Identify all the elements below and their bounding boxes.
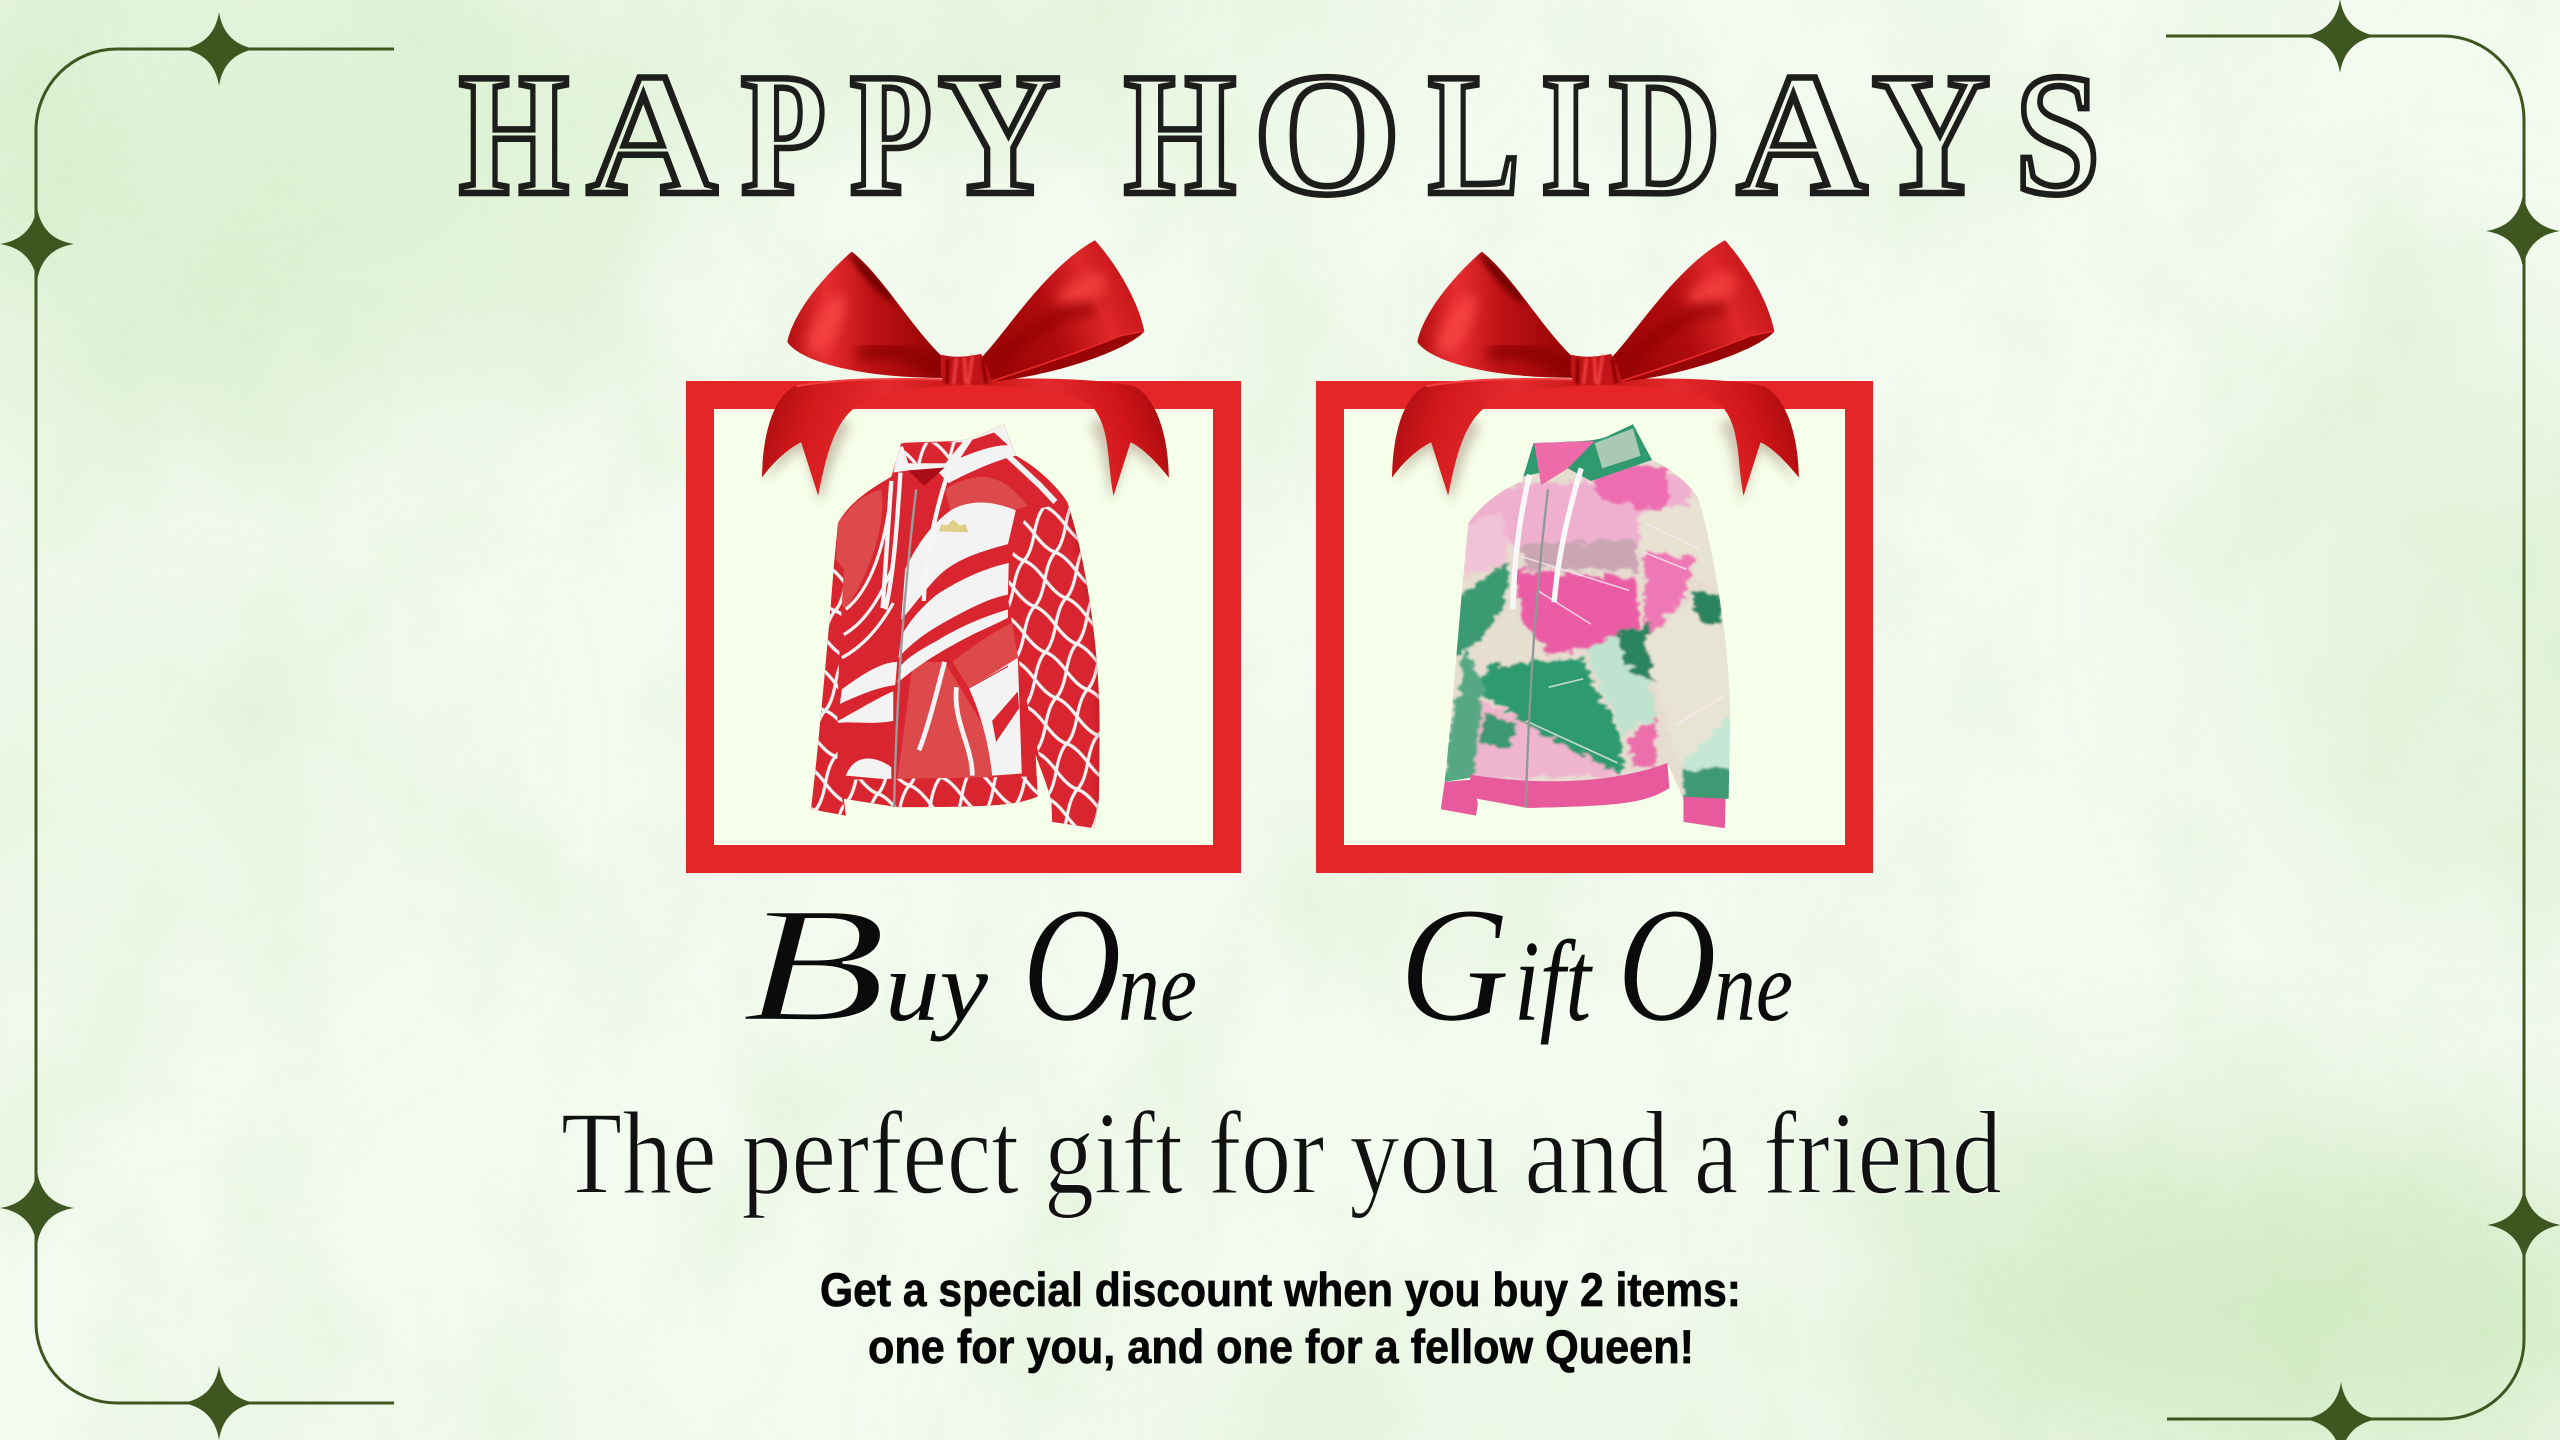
- lattice sleeve: [1008, 502, 1100, 828]
- title: P: [741, 37, 826, 231]
- hoodie: red and white: [802, 418, 1111, 835]
- decorative frame: top left corner: [36, 12, 394, 1323]
- star top left horizontal: [182, 12, 256, 86]
- offer text: [820, 1263, 1741, 1373]
- title: D: [1609, 37, 1721, 231]
- caption: gift one: G: [1399, 873, 1510, 1056]
- title: Y: [1872, 37, 1990, 231]
- title: H: [459, 37, 569, 231]
- panel: gift box buy one: [700, 395, 1227, 859]
- drawstrings: [883, 468, 949, 609]
- title: S: [2015, 37, 2100, 231]
- panel: gift box gift one: [1330, 395, 1859, 859]
- logo: tiara: [939, 520, 968, 532]
- hood: [1522, 424, 1652, 481]
- star left upper: [0, 207, 74, 281]
- offer line two: one for you, and one for a fellow Queen!: [868, 1320, 1694, 1373]
- ribbon bow left: [762, 240, 1169, 502]
- gift box frame right: [1330, 395, 1859, 859]
- title: A: [587, 37, 717, 231]
- caption: gift one: O: [1617, 873, 1717, 1056]
- title: P: [850, 37, 932, 231]
- caption: buy one: O: [1022, 873, 1122, 1056]
- decorative frame: top right corner: [2166, 0, 2524, 1419]
- star right upper: [2486, 194, 2560, 268]
- star left lower: [0, 1171, 74, 1245]
- cuffs and hem: [1441, 763, 1726, 828]
- hood: [893, 424, 1016, 483]
- hoodie: pink and green: [1438, 418, 1736, 835]
- caption: buy one: uy: [885, 931, 989, 1042]
- gift box frame left: [700, 395, 1227, 859]
- drawstrings: [1513, 468, 1581, 609]
- title: L: [1428, 37, 1520, 231]
- lighter swirls: [834, 489, 882, 609]
- title: O: [1253, 37, 1401, 231]
- title: I: [1541, 37, 1591, 231]
- paint streaks: [1522, 523, 1725, 763]
- white bands: [901, 502, 1016, 620]
- offer line one: Get a special discount when you buy 2 items:: [820, 1263, 1741, 1316]
- star top right horizontal: [2303, 0, 2377, 73]
- caption: gift one: ift: [1514, 918, 1593, 1045]
- title: A: [1737, 37, 1867, 231]
- caption: gift one: ne: [1714, 931, 1793, 1042]
- zipper: [894, 489, 916, 807]
- star bottom left horizontal: [182, 1366, 256, 1440]
- star right lower: [2487, 1188, 2560, 1262]
- ribbon bow right: [1392, 240, 1799, 502]
- subtitle: The perfect gift for you and a friend: [561, 1087, 2002, 1219]
- zipper: [1526, 489, 1548, 807]
- decorative frame: bottom left corner: [36, 1323, 394, 1440]
- title: Y: [938, 37, 1058, 231]
- caption: buy one: ne: [1118, 931, 1197, 1042]
- title: H: [1124, 37, 1236, 231]
- star bottom right horizontal: [2304, 1382, 2378, 1440]
- caption: buy one: B: [741, 873, 887, 1056]
